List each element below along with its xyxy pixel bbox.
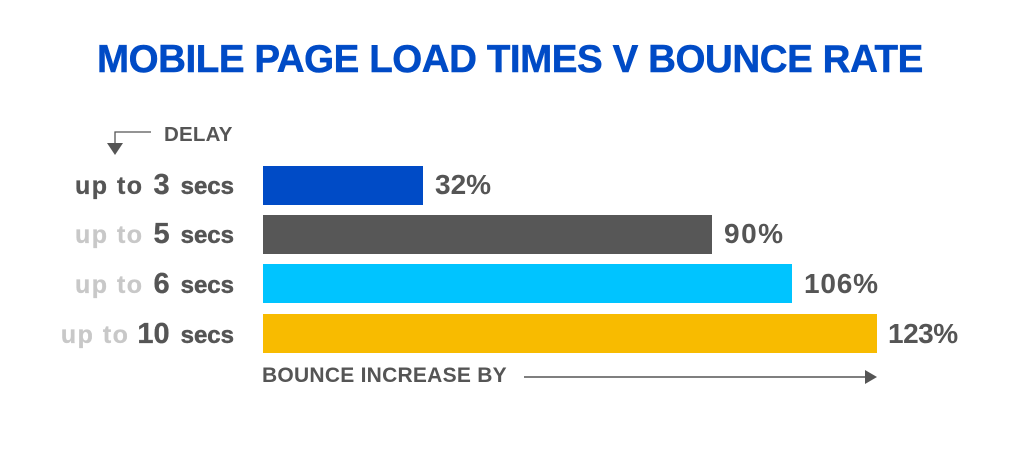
bar: 123% <box>263 314 877 353</box>
delay axis label: DELAY <box>164 123 233 146</box>
bounce axis label: BOUNCE INCREASE BY <box>262 364 507 387</box>
row label: up to 5 secs: up to 5 secs <box>75 218 234 250</box>
row label: up to 3 secs: up to 3 secs <box>75 169 234 201</box>
value: 32%: 32% <box>435 169 491 200</box>
value: 106%: 106% <box>804 268 879 299</box>
bar: 106% <box>263 264 792 303</box>
row label: up to 6 secs: up to 6 secs <box>75 268 234 300</box>
bar: 90% <box>263 215 712 254</box>
value: 123%: 123% <box>888 318 958 349</box>
value: 90%: 90% <box>724 218 785 249</box>
icon: bounce arrow <box>524 370 877 384</box>
bar: 32% <box>263 166 423 205</box>
icon: delay arrow <box>107 131 151 155</box>
title: MOBILE PAGE LOAD TIMES V BOUNCE RATE <box>97 38 923 81</box>
row label: up to 10 secs: up to 10 secs <box>61 318 234 350</box>
